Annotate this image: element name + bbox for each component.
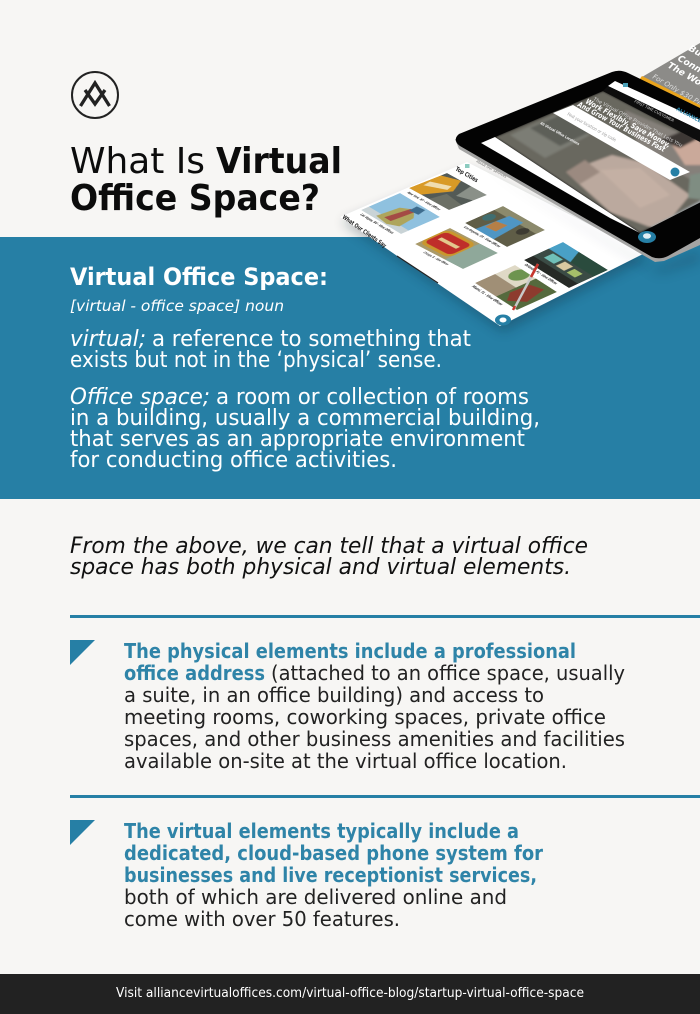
text block: virtual elements: dedicated, cloud-based phone system for	[124, 841, 543, 865]
photo: red sign	[415, 228, 498, 269]
definition: virtual: virtual;	[70, 327, 146, 352]
text block: virtual elements: businesses and live receptionist services,	[124, 863, 537, 887]
page nav text: About Our Services	[476, 159, 507, 179]
definition: virtual: a reference to something that	[152, 327, 471, 352]
text block: physical elements: spaces, and other business amenities and facilities	[124, 727, 625, 751]
pronunciation: [virtual - office space] noun	[70, 297, 284, 315]
photo: yellow taxi	[409, 173, 487, 210]
grey sheet text	[651, 44, 700, 110]
definition: office space	[70, 385, 540, 473]
photo: guitar player	[465, 206, 545, 247]
tablet body	[456, 71, 700, 258]
page heading: clients: What Our Clients Say	[341, 214, 388, 249]
page chat button	[495, 314, 511, 326]
definition: office space: Office space;	[70, 385, 210, 410]
text block: physical elements: The physical elements include a professional	[124, 639, 576, 663]
text block: virtual elements	[124, 819, 543, 931]
page shadow	[342, 170, 648, 332]
text block: virtual elements: come with over 50 features.	[124, 907, 400, 931]
text block: physical elements	[124, 639, 625, 773]
text block: virtual elements: The virtual elements typically include a	[124, 819, 519, 843]
photo: bear statue	[475, 264, 560, 310]
photo captions	[359, 191, 559, 306]
locations button label: All Virtual Office Locations	[540, 121, 581, 146]
text block: virtual elements: both of which are delivered online and	[124, 885, 507, 909]
screen white header band	[608, 81, 700, 130]
tablet silver edge	[455, 139, 700, 262]
photo captions: Chicago, IL - View Offices	[422, 251, 450, 266]
text block: physical elements: available on-site at the virtual office location.	[124, 749, 567, 773]
orange stripe	[639, 76, 700, 110]
photo: green building	[524, 242, 608, 288]
screen white strip	[481, 137, 640, 233]
definition: office space: in a building, usually a commercial building,	[70, 406, 540, 431]
header icon	[623, 83, 628, 87]
definition: office space: for conducting office activities.	[70, 448, 397, 473]
search bar	[553, 105, 690, 180]
hero text: Work Flexibly, Save Money,	[584, 97, 672, 149]
tablet shadow	[470, 160, 700, 274]
icon: triangle marker physical	[70, 640, 95, 665]
photo: dinosaur statue	[361, 193, 440, 234]
definition: office space: a room or collection of rooms	[216, 385, 529, 410]
photo captions: Las Vegas, NV - View Offices	[359, 213, 395, 234]
title	[70, 141, 342, 219]
text block: physical elements: meeting rooms, coworking spaces, private office	[124, 705, 606, 729]
summary statement: space has both physical and virtual elements.	[70, 555, 571, 580]
pen	[513, 264, 538, 310]
photo captions: Orlando, FL - View Offices	[523, 263, 559, 285]
summary statement: From the above, we can tell that a virtual office	[70, 534, 588, 559]
hero text: And Grow Your Business Fast	[575, 99, 667, 154]
definition: virtual	[70, 327, 471, 373]
title: What Is	[70, 141, 205, 182]
tablet and page mockup	[340, 43, 700, 332]
icon: triangle marker virtual	[70, 820, 95, 845]
definition: office space: that serves as an appropriate environment	[70, 427, 525, 452]
search placeholder text: Find your location or zip code	[566, 112, 617, 144]
title: Office Space?	[70, 178, 320, 219]
page divider	[397, 256, 438, 283]
definition: virtual: exists but not in the ‘physical’ sense.	[70, 348, 442, 373]
page heading: top cities: Top Cities	[454, 166, 479, 184]
panel: definition band	[0, 237, 700, 499]
tablet chat button	[638, 231, 656, 243]
photo captions: Miami, FL - View Offices	[470, 285, 504, 306]
definition text	[70, 263, 540, 473]
definition heading: Virtual Office Space:	[70, 263, 328, 291]
text block: physical elements: (attached to an office space, usually	[271, 661, 625, 685]
header phone text: FIRST TIME CUSTOMER	[634, 98, 675, 123]
white web page sheet	[340, 162, 645, 326]
grey back sheet	[642, 43, 700, 105]
text block: physical elements: office address	[124, 661, 265, 685]
hero text: The Virtual Office Provider That Lets You	[592, 96, 683, 149]
title: Virtual	[216, 141, 342, 182]
summary statement	[70, 534, 588, 580]
text block: physical elements: a suite, in an office building) and access to	[124, 683, 544, 707]
footer bar	[0, 974, 700, 1014]
footer bar: Visit alliancevirtualoffices.com/virtual-office-blog/startup-virtual-office-space	[116, 986, 584, 1001]
screen black header band	[603, 86, 700, 142]
photo captions: New York, NY - View Offices	[406, 191, 442, 211]
search button	[670, 168, 680, 176]
icon: Alliance logo	[72, 72, 118, 118]
page icon: menu square	[465, 164, 470, 168]
photo captions: Los Angeles, CA - View Offices	[462, 226, 502, 248]
screen hero photo	[495, 91, 700, 233]
